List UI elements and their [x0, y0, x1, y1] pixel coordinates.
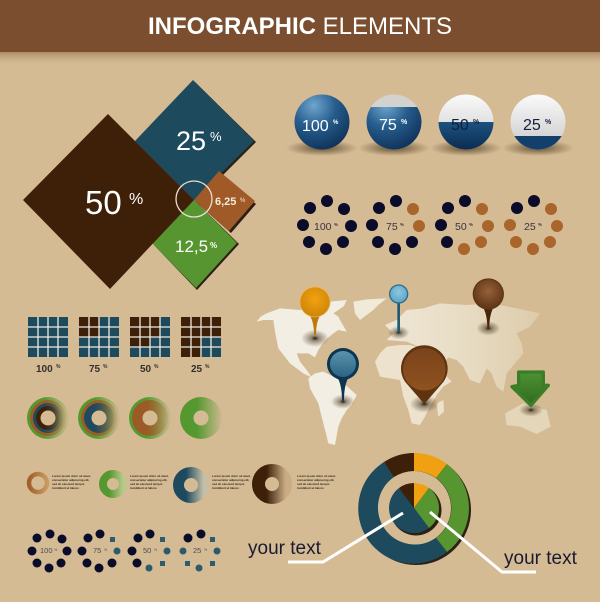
- grid 75 percent: [79, 317, 119, 375]
- donut green: [103, 474, 169, 494]
- small dots 100 percent: 100: [40, 546, 53, 555]
- small dots 75 percent: %: [104, 548, 107, 552]
- grid tiles row: [28, 317, 221, 375]
- donut blue: incididunt ut labore: [212, 486, 239, 490]
- donut orange: Lorem ipsum dolor sit amet,: [52, 474, 91, 478]
- grid 25 percent: 25: [191, 364, 203, 375]
- donut brown: Lorem ipsum dolor sit amet,: [297, 474, 336, 478]
- small dots 75 percent: [78, 530, 120, 572]
- donuts with captions: [29, 470, 336, 498]
- diamond: 12,5 percent: %: [210, 241, 217, 250]
- dots 75 percent: 75: [386, 221, 398, 233]
- grid 75 percent: 75: [89, 364, 101, 375]
- diamond: 6,25 percent: 6,25: [215, 196, 236, 208]
- diamond: 25 percent: 25: [176, 126, 206, 156]
- sphere 75 percent: [358, 94, 430, 156]
- small dots 25 percent: %: [204, 548, 207, 552]
- donut brown: sed do eiusmod tempor: [297, 482, 330, 486]
- callout right: [430, 512, 578, 572]
- sphere 50 percent: %: [473, 119, 480, 126]
- dots 75 percent: [366, 195, 425, 255]
- callout left: [248, 513, 403, 562]
- pin: teal: [327, 348, 359, 409]
- sphere 50 percent: [430, 94, 502, 156]
- donut orange: consectetur adipiscing elit,: [52, 478, 89, 482]
- world map: [257, 298, 551, 445]
- dots 100 percent: %: [334, 222, 338, 227]
- grid 75 percent: %: [103, 364, 108, 370]
- small dots 25 percent: 25: [193, 546, 201, 555]
- center ring: [176, 181, 212, 217]
- pin: light blue: [388, 285, 409, 339]
- dot rings row: [297, 195, 563, 255]
- dots 50 percent: %: [469, 222, 473, 227]
- callout right: your text: [504, 548, 578, 569]
- dots 25 percent: %: [538, 222, 542, 227]
- donut blue: Lorem ipsum dolor sit amet,: [212, 474, 251, 478]
- grid 50 percent: [130, 317, 170, 375]
- diamond: 50 percent: %: [129, 191, 143, 208]
- grid 50 percent: %: [154, 364, 159, 370]
- diamond: 50 percent: 50: [85, 184, 122, 221]
- header banner: [0, 0, 600, 66]
- ring 1: [27, 397, 69, 439]
- callout left: your text: [248, 538, 322, 559]
- dots 75 percent: %: [400, 222, 404, 227]
- dots 50 percent: 50: [455, 221, 467, 233]
- donut blue: consectetur adipiscing elit,: [212, 478, 249, 482]
- grid 100 percent: 100: [36, 364, 53, 375]
- donut shadow: [361, 455, 471, 565]
- grid 25 percent: [181, 317, 221, 375]
- ring 2: [78, 397, 120, 439]
- donut blue: sed do eiusmod tempor: [212, 482, 245, 486]
- sphere 100 percent: 100: [302, 118, 329, 135]
- big donut chart: [358, 453, 471, 565]
- donut orange: [29, 474, 91, 492]
- diamond: 6,25 percent: [194, 171, 256, 233]
- diamond percentage chart: [23, 80, 256, 290]
- donut brown: consectetur adipiscing elit,: [297, 478, 334, 482]
- world map with pins: [257, 278, 551, 445]
- ring 4: [180, 397, 222, 439]
- sphere 25 percent: [502, 94, 574, 156]
- pin: orange: [299, 286, 331, 347]
- spheres row: [286, 94, 574, 156]
- grid 50 percent: 50: [140, 364, 152, 375]
- pin: big brown: [401, 345, 448, 413]
- small dots 75 percent: 75: [93, 546, 101, 555]
- sphere 25 percent: 25: [523, 117, 541, 134]
- small dots 100 percent: [28, 530, 72, 572]
- diamond: 50 percent: [23, 114, 194, 289]
- concentric rings row: [27, 397, 222, 439]
- sphere 100 percent: [286, 94, 358, 156]
- pin: green arrow: [512, 372, 548, 417]
- grid 100 percent: %: [56, 364, 61, 370]
- diamond: 25 percent: [135, 80, 256, 202]
- grid 100 percent: [28, 317, 68, 375]
- bottom dot rings row: [28, 530, 220, 572]
- pin: dark brown: [473, 278, 504, 336]
- dots 25 percent: 25: [524, 221, 536, 233]
- donut green: sed do eiusmod tempor: [130, 482, 163, 486]
- small dots 100 percent: %: [54, 548, 57, 552]
- small dots 50 percent: %: [154, 548, 157, 552]
- grid 25 percent: %: [205, 364, 210, 370]
- dots 100 percent: 100: [314, 221, 332, 233]
- donut orange: sed do eiusmod tempor: [52, 482, 85, 486]
- small dots 50 percent: 50: [143, 546, 151, 555]
- small dots 25 percent: [180, 530, 220, 572]
- donut orange: incididunt ut labore: [52, 486, 79, 490]
- diamond: 12,5 percent: 12,5: [175, 237, 208, 256]
- outer ring segments: [358, 453, 469, 564]
- sphere 75 percent: 75: [379, 117, 397, 134]
- dots 25 percent: [504, 195, 563, 255]
- donut blue: [178, 472, 251, 498]
- diamond: 6,25 percent: %: [240, 198, 246, 204]
- donut green: Lorem ipsum dolor sit amet,: [130, 474, 169, 478]
- dots 100 percent: [297, 195, 357, 255]
- sphere 100 percent: %: [333, 120, 339, 126]
- donut brown: incididunt ut labore: [297, 486, 324, 490]
- ring 3: [129, 397, 171, 439]
- diamond: 25 percent: %: [210, 129, 222, 144]
- donut green: consectetur adipiscing elit,: [130, 478, 167, 482]
- sphere 50 percent: 50: [451, 117, 469, 134]
- diamond: 12,5 percent: [152, 200, 239, 290]
- donut green: incididunt ut labore: [130, 486, 157, 490]
- sphere 25 percent: %: [545, 119, 552, 126]
- small dots 50 percent: [128, 530, 170, 572]
- title: INFOGRAPHIC ELEMENTS: [148, 13, 452, 40]
- sphere 75 percent: %: [401, 119, 408, 126]
- donut brown: [258, 470, 336, 498]
- inner pie: [389, 483, 442, 536]
- dots 50 percent: [435, 195, 494, 255]
